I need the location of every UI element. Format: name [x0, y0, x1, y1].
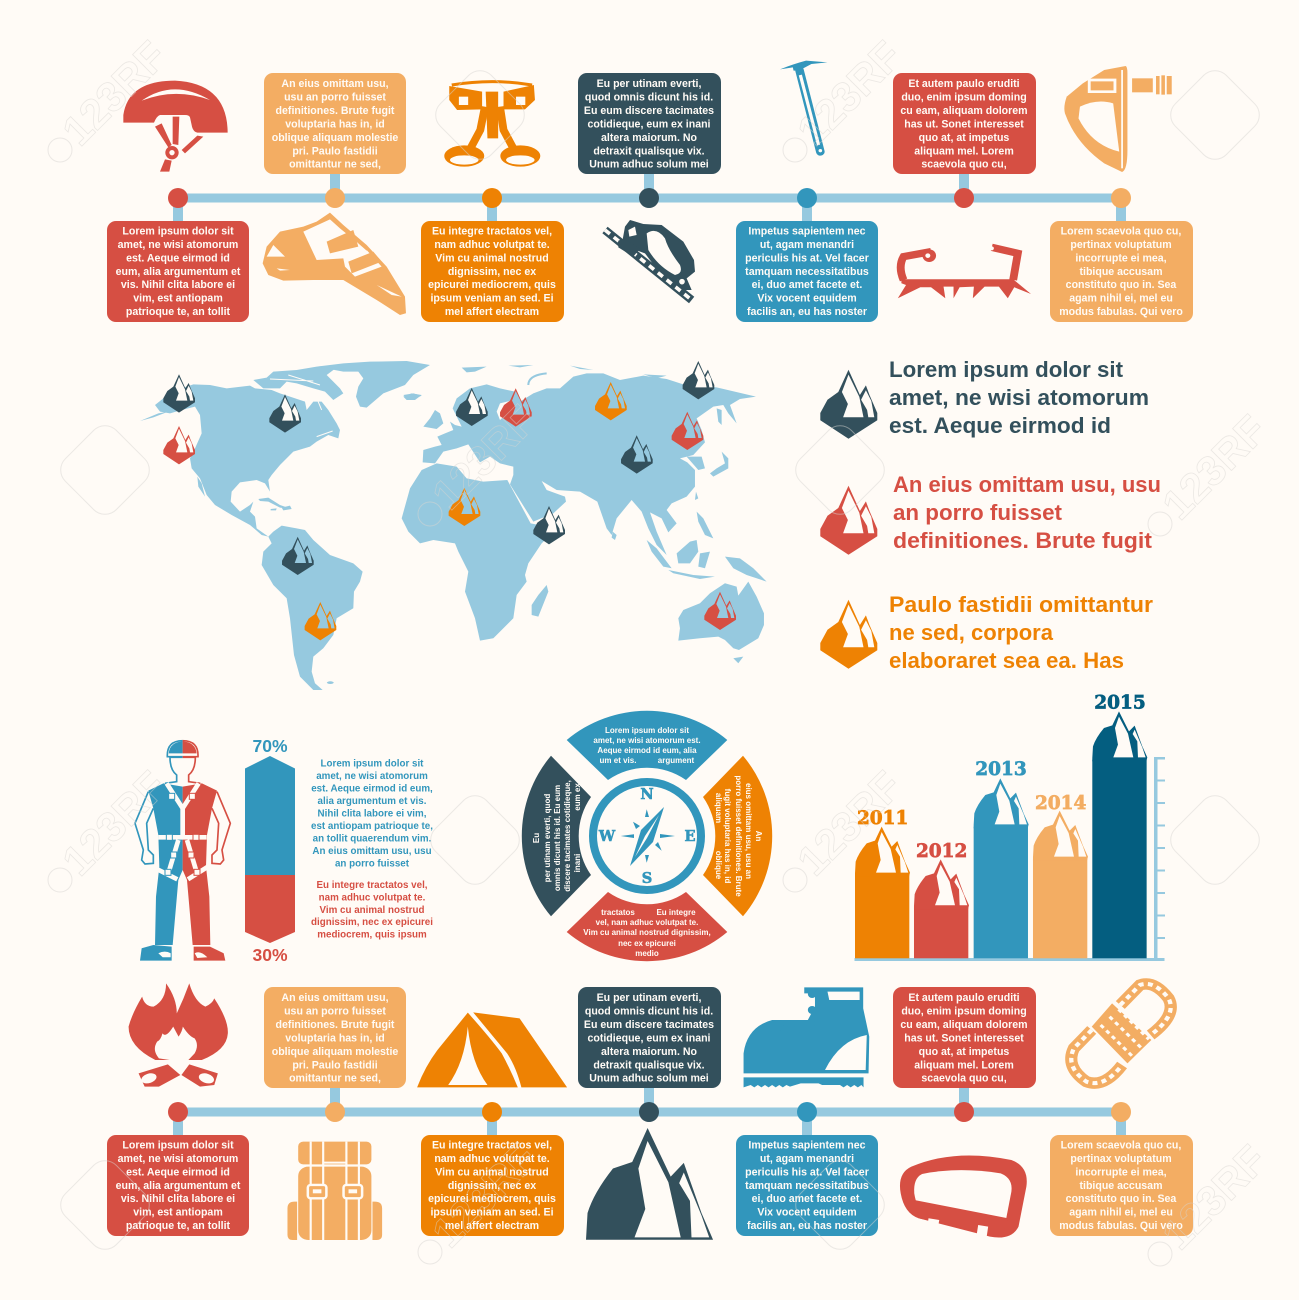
year labels: 2014 — [1035, 793, 1087, 814]
text box: top 5: facilis an, eu has noster — [747, 306, 867, 318]
icon: belay plate — [1064, 66, 1172, 172]
bar chart — [854, 692, 1165, 961]
legend: dark: est. Aeque eirmod id — [889, 413, 1111, 438]
text box: bottom 1: vim, est antiopam — [133, 1206, 223, 1218]
legend: orange: elaboraret sea ea. Has — [889, 648, 1124, 673]
text box: bottom 3: ipsum veniam an sed. Ei — [430, 1206, 554, 1218]
text box: bottom 7: Lorem scaevola quo cu, — [1061, 1140, 1181, 1152]
text box: bottom 3 — [421, 1135, 564, 1236]
text: blue paragraph: Lorem ipsum dolor sit — [321, 758, 424, 770]
segment: top: Lorem ipsum dolor sit — [605, 726, 689, 735]
watermark: 123RF — [1153, 1136, 1276, 1258]
text box: bottom 7: incorrupte ei mea, — [1075, 1166, 1167, 1178]
text box: top 2: usu an porro fuisset — [284, 92, 386, 104]
text box: top 7: agam nihil ei, mel eu — [1069, 292, 1173, 304]
segment: right: fugit voluptaria has in, id — [723, 789, 732, 883]
legend: red: definitiones. Brute fugit — [893, 528, 1153, 553]
legend: orange: ne sed, corpora — [889, 620, 1054, 645]
text box: bottom 7: agam nihil ei, mel eu — [1069, 1206, 1173, 1218]
year labels — [857, 692, 1146, 862]
text box: top 2 — [264, 73, 406, 174]
text box: bottom 3: Vim cu animal nostrud — [435, 1166, 549, 1178]
segment: bottom: nec ex epicurei — [618, 939, 676, 948]
segment: right: porro fuisset definitiones. Brute — [734, 775, 743, 897]
text box: top 1: vim, est antiopam — [133, 292, 223, 304]
segment: left: eum ex — [573, 783, 582, 811]
text box: top 5: tamquam necessitatibus — [745, 266, 869, 278]
text box: bottom 5: ut, agam menandri — [760, 1153, 854, 1165]
text box: bottom 2: An eius omittam usu, — [281, 992, 389, 1004]
text box: top 4: Eu per utinam everti, — [597, 78, 701, 90]
text box: top 6: Et autem paulo eruditi — [908, 78, 1020, 90]
icon: backpack — [287, 1142, 382, 1240]
watermark: 123RF — [53, 32, 176, 154]
text box: bottom 6 — [893, 987, 1036, 1088]
text box: top 1: Lorem ipsum dolor sit — [122, 226, 234, 238]
text box: bottom 5: Vix vocent equidem — [757, 1206, 857, 1218]
watermark: 123RF — [423, 1134, 546, 1256]
legend: red: an porro fuisset — [893, 500, 1063, 525]
text box: bottom 1: vis. Nihil clita labore ei — [121, 1193, 235, 1205]
legend: dark: Lorem ipsum dolor sit — [889, 357, 1124, 382]
segment: top — [567, 711, 727, 780]
segment: bottom: Eu integre — [656, 908, 696, 917]
text box: top 7: modus fabulas. Qui vero — [1059, 306, 1183, 318]
text: blue paragraph: est antiopam patrioque te, — [311, 821, 433, 832]
segment: right: aliquam — [714, 793, 723, 823]
text box: top 5: ut, agam menandri — [760, 239, 854, 251]
text box: top 4: Eu eum discere tacimates — [584, 105, 714, 117]
segment: top: argument — [658, 756, 695, 765]
watermark: 123RF — [53, 762, 176, 884]
segment: top: um et vis. — [600, 756, 636, 765]
text box: top 3: Eu integre tractatos vel, — [432, 226, 552, 238]
text box: bottom 6: has ut. Sonet interesset — [904, 1032, 1024, 1044]
icon: compass: N — [640, 786, 654, 803]
legend: dark: amet, ne wisi atomorum — [889, 385, 1149, 410]
text box: top 5: Vix vocent equidem — [757, 292, 857, 304]
text box: top 6: has ut. Sonet interesset — [904, 118, 1024, 130]
text: red paragraph: Eu integre tractatos vel, — [316, 880, 428, 891]
text box: top 1: eum, alia argumentum et — [116, 266, 241, 278]
icon: climbing shoe — [263, 213, 406, 315]
watermark: 123RF — [1153, 406, 1276, 528]
eurasia, africa, oceania — [402, 365, 767, 663]
legend: dark — [820, 357, 1149, 439]
text box: bottom 5: periculis his at. Vel facer — [745, 1166, 869, 1178]
text box: bottom 4: Eu eum discere tacimates — [584, 1019, 714, 1031]
segment: left: discere tacimates cotidieque, — [563, 780, 572, 892]
text: blue paragraph: Nihil clita labore ei vim, — [318, 808, 427, 820]
legend: red: An eius omittam usu, usu — [893, 472, 1161, 497]
text box: bottom 4: altera maiorum. No — [601, 1046, 698, 1058]
percentage bar: 30% — [252, 945, 288, 965]
text box: top 7: constituto quo in. Sea — [1066, 279, 1176, 291]
text box: bottom 4: Unum adhuc solum mei — [589, 1072, 709, 1084]
text: blue paragraph: amet, ne wisi atomorum — [316, 771, 428, 782]
text box: bottom 5: tamquam necessitatibus — [745, 1180, 869, 1192]
text box: top 4: cotidieque, eum ex inani — [587, 118, 711, 130]
text box: top 6: aliquam mel. Lorem — [914, 146, 1014, 158]
text box: bottom 6: aliquam mel. Lorem — [914, 1060, 1014, 1072]
segment: top: Aeque eirmod id eum, alia — [597, 746, 697, 755]
text box: top 1 — [107, 221, 249, 322]
icon: compass: S — [642, 870, 652, 887]
segment: bottom — [567, 892, 727, 961]
text box: bottom 6: quo at, at impetus — [919, 1046, 1009, 1058]
text box: top 4: altera maiorum. No — [601, 132, 698, 144]
text box: top 7: Lorem scaevola quo cu, — [1061, 226, 1181, 238]
text box: top 5 — [736, 221, 878, 322]
text box: bottom 7 — [1050, 1135, 1193, 1236]
icon: compass: W — [598, 828, 616, 845]
text box: top 1: patrioque te, an tollit — [126, 306, 231, 318]
segment: right: oblique — [714, 851, 723, 880]
segment: bottom: vel, nam adhuc volutpat te. — [596, 918, 698, 927]
segment: right: An — [754, 831, 763, 841]
text: red paragraph: nam adhuc volutpat te. — [319, 892, 426, 904]
legend: red — [820, 472, 1161, 555]
text box: top 2: pri. Paulo fastidii — [292, 146, 378, 158]
text box: bottom 2: omittantur ne sed, — [289, 1072, 381, 1084]
text box: top 7: incorrupte ei mea, — [1075, 252, 1167, 264]
text box: top 7: tibique accusam — [1079, 266, 1163, 278]
segment: right: eius omittam usu, usu an — [744, 783, 753, 879]
text box: top 6: quo at, at impetus — [919, 132, 1009, 144]
text: blue paragraph: an tollit quaerendum vim. — [313, 834, 432, 844]
text box: bottom 6: duo, enim ipsum doming — [901, 1006, 1027, 1018]
segment: left: Eu — [532, 833, 541, 843]
text box: top 3: epicurei mediocrem, quis — [428, 279, 556, 291]
segment: left: per utinam everti, quod — [543, 794, 552, 882]
text box: bottom 2: definitiones. Brute fugit — [276, 1019, 395, 1031]
text box: top 3: nam adhuc volutpat te. — [434, 239, 550, 251]
text box: top 4: Unum adhuc solum mei — [589, 158, 709, 170]
icon: helmet — [123, 81, 228, 172]
text box: bottom 6: cu eam, aliquam dolorem — [900, 1019, 1028, 1031]
segment: bottom: Vim cu animal nostrud dignissim, — [583, 928, 711, 937]
americas and Greenland — [140, 361, 430, 690]
compass panel — [522, 711, 772, 961]
percentage bar: 70% — [252, 736, 288, 756]
percentage bar — [245, 736, 295, 965]
text box: bottom 1 — [107, 1135, 249, 1236]
text box: bottom 4: cotidieque, eum ex inani — [587, 1032, 711, 1044]
icon: campfire — [129, 983, 228, 1087]
text box: bottom 1: eum, alia argumentum et — [116, 1180, 241, 1192]
text box: top 6 — [893, 73, 1036, 174]
text box: top 2: voluptaria has in, id — [285, 118, 385, 130]
text: blue paragraph: an porro fuisset — [335, 858, 410, 870]
text box: bottom 5: Impetus sapientem nec — [748, 1140, 866, 1152]
text box: bottom 7: constituto quo in. Sea — [1066, 1193, 1176, 1205]
text box: bottom 7: tibique accusam — [1079, 1180, 1163, 1192]
text box: top 3: mel affert electram — [445, 306, 539, 318]
icon: hiking boot — [744, 987, 869, 1087]
text box: bottom 1: patrioque te, an tollit — [126, 1220, 231, 1232]
legend: orange: Paulo fastidii omittantur — [889, 592, 1153, 617]
map markers — [163, 361, 736, 640]
text box: top 6: cu eam, aliquam dolorem — [900, 105, 1028, 117]
text: red paragraph: Vim cu animal nostrud — [320, 905, 424, 916]
text box: bottom 6: scaevola quo cu, — [921, 1072, 1007, 1084]
segment: left: inani — [573, 854, 582, 872]
text box: bottom 5 — [736, 1135, 878, 1236]
icon: mountain — [586, 1128, 713, 1240]
text box: bottom 6: Et autem paulo eruditi — [908, 992, 1020, 1004]
text: blue paragraph — [311, 758, 433, 870]
axis — [854, 757, 1165, 961]
text box: top 6: duo, enim ipsum doming — [901, 92, 1027, 104]
text box: bottom 1: amet, ne wisi atomorum — [118, 1153, 238, 1165]
text box: top 3: ipsum veniam an sed. Ei — [430, 292, 554, 304]
text: blue paragraph: An eius omittam usu, usu — [312, 846, 432, 857]
text box: top 5: Impetus sapientem nec — [748, 226, 866, 238]
text box: top 3 — [421, 221, 564, 322]
text: blue paragraph: est. Aeque eirmod id eum, — [311, 784, 433, 794]
icon: belay device — [605, 220, 695, 300]
watermark: 123RF — [423, 396, 546, 518]
text box: top 1: amet, ne wisi atomorum — [118, 239, 238, 251]
text box: bottom 1: est. Aeque eirmod id — [126, 1166, 230, 1178]
text box: bottom 3: nam adhuc volutpat te. — [434, 1153, 550, 1165]
segment: top: amet, ne wisi atomorum est. — [593, 736, 701, 745]
text box: top 4: detraxit qualisque vix. — [593, 146, 705, 158]
text box: bottom 2: usu an porro fuisset — [284, 1006, 386, 1018]
icon: tent — [417, 1012, 567, 1087]
text box: top 2: definitiones. Brute fugit — [276, 105, 395, 117]
text: red paragraph: mediocrem, quis ipsum — [317, 930, 427, 940]
icon: rope coil — [1071, 984, 1171, 1083]
text: blue paragraph: alia argumentum et vis. — [318, 796, 427, 807]
text box: top 7 — [1050, 221, 1193, 322]
text box: top 2: omittantur ne sed, — [289, 158, 381, 170]
text box: bottom 4: detraxit qualisque vix. — [593, 1060, 705, 1072]
text box: bottom 3: dignissim, nec ex — [448, 1180, 536, 1192]
legend: orange — [820, 592, 1153, 673]
text box: top 5: periculis his at. Vel facer — [745, 252, 869, 264]
icon: crampon — [898, 246, 1031, 298]
bars — [855, 711, 1147, 958]
icon: compass: E — [684, 828, 696, 845]
text box: top 6: scaevola quo cu, — [921, 158, 1007, 170]
text box: bottom 2 — [264, 987, 406, 1088]
text box: bottom 7: modus fabulas. Qui vero — [1059, 1220, 1183, 1232]
text: red paragraph — [311, 880, 433, 940]
year labels: 2013 — [975, 759, 1027, 780]
top timeline — [168, 172, 1131, 223]
text box: bottom 4: Eu per utinam everti, — [597, 992, 701, 1004]
text box: top 3: dignissim, nec ex — [448, 266, 536, 278]
icon: carabiner — [900, 1155, 1027, 1239]
segment: bottom: medio — [635, 949, 659, 958]
text box: top 5: ei, duo amet facete et. — [752, 279, 862, 291]
text box: bottom 2: oblique aliquam molestie — [272, 1046, 398, 1058]
year labels: 2015 — [1094, 692, 1146, 714]
year labels: 2012 — [916, 841, 967, 862]
text box: bottom 2: voluptaria has in, id — [285, 1032, 385, 1044]
text box: bottom 5: ei, duo amet facete et. — [752, 1193, 862, 1205]
text box: top 2: An eius omittam usu, — [281, 78, 389, 90]
segment: left — [522, 756, 591, 916]
text: red paragraph: dignissim, nec ex epicurei — [311, 917, 433, 928]
text box: bottom 3: mel affert electram — [445, 1220, 539, 1232]
segment: bottom: tractatos — [601, 908, 635, 917]
text box: bottom 4: quod omnis dicunt his id. — [585, 1006, 713, 1018]
text box: bottom 7: pertinax voluptatum — [1070, 1153, 1172, 1165]
text box: top 3: Vim cu animal nostrud — [435, 252, 549, 264]
watermark: 123RF — [788, 32, 911, 154]
text box: top 7: pertinax voluptatum — [1070, 239, 1172, 251]
segment: right — [703, 756, 772, 916]
text box: bottom 3: Eu integre tractatos vel, — [432, 1140, 552, 1152]
text box: bottom 2: pri. Paulo fastidii — [292, 1060, 378, 1072]
world map — [140, 361, 767, 690]
text box: bottom 4 — [578, 987, 721, 1088]
icon: compass — [593, 782, 701, 890]
segment: left: omnis dicunt his id. Eu eum — [553, 785, 562, 891]
watermark: 123RF — [788, 762, 911, 884]
icon: ice axe — [780, 61, 827, 152]
year labels: 2011 — [857, 808, 908, 829]
text box: bottom 3: epicurei mediocrem, quis — [428, 1193, 556, 1205]
climber figure — [135, 741, 230, 961]
text box: top 1: vis. Nihil clita labore ei — [121, 279, 235, 291]
text box: top 4 — [578, 73, 721, 174]
text box: top 2: oblique aliquam molestie — [272, 132, 398, 144]
bottom timeline — [168, 1086, 1131, 1137]
icon: harness — [444, 82, 540, 167]
text box: bottom 5: facilis an, eu has noster — [747, 1220, 867, 1232]
text box: top 4: quod omnis dicunt his id. — [585, 92, 713, 104]
text box: top 1: est. Aeque eirmod id — [126, 252, 230, 264]
text box: bottom 1: Lorem ipsum dolor sit — [122, 1140, 234, 1152]
